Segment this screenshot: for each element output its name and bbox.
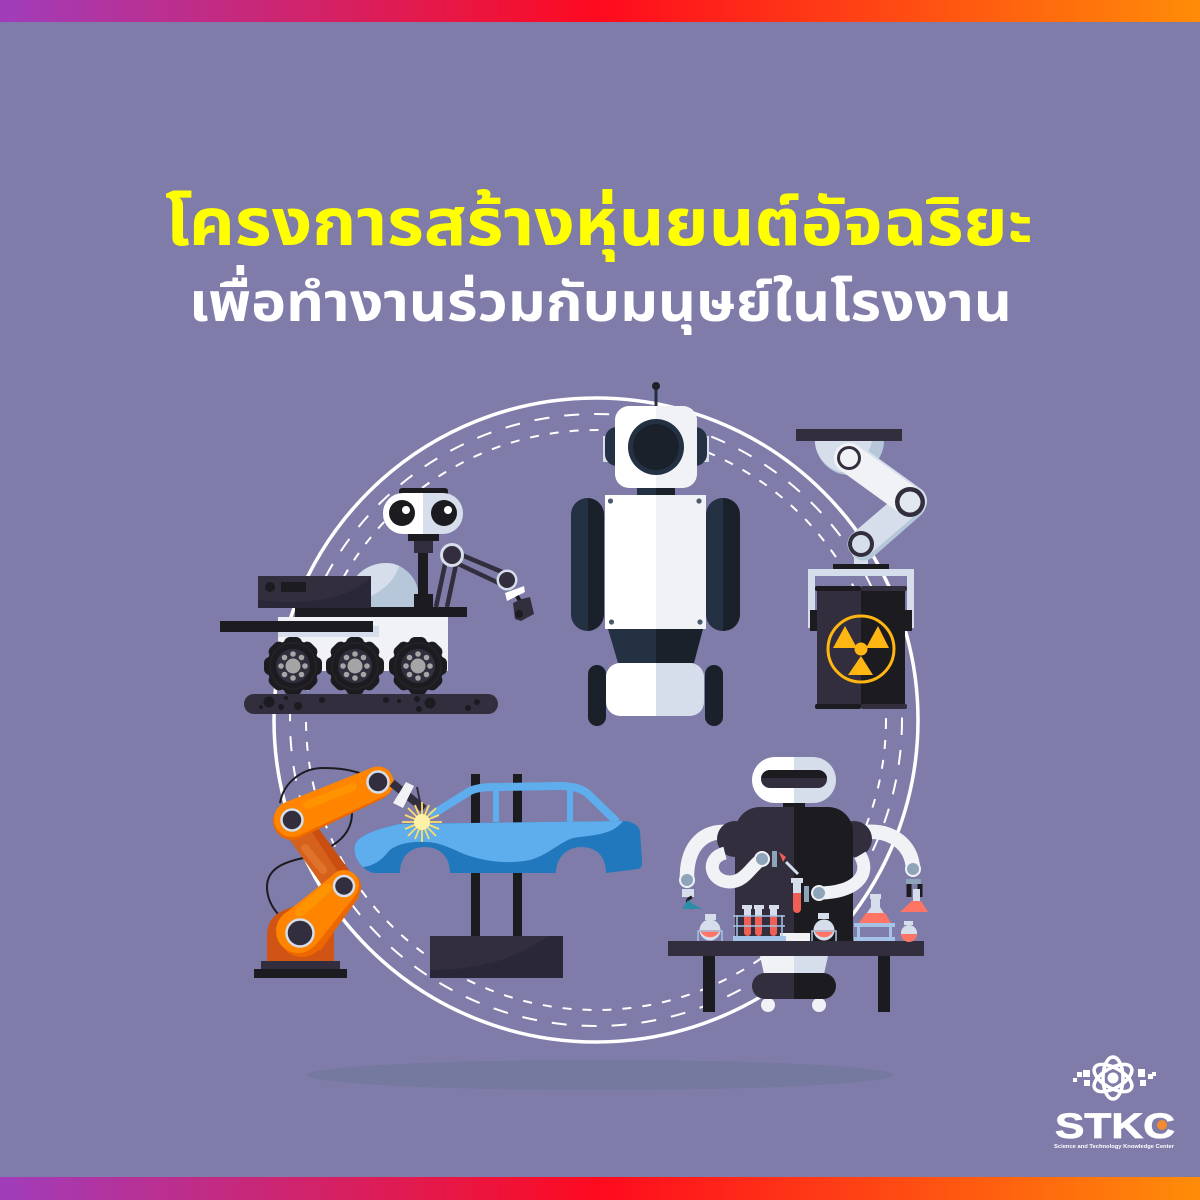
hips <box>606 663 704 716</box>
cables <box>267 768 365 914</box>
rover console box <box>258 576 371 608</box>
lower body <box>752 956 836 1012</box>
car body highlight <box>355 821 623 867</box>
ground shadow <box>307 1060 893 1090</box>
hand flask <box>900 889 928 912</box>
left arm <box>571 498 604 631</box>
car body <box>355 821 642 873</box>
logo orange dot <box>1157 1120 1167 1130</box>
central white robot <box>571 382 740 726</box>
joints <box>282 772 388 946</box>
conical flask on stand <box>854 894 895 941</box>
rover wheels <box>264 637 447 695</box>
round flask centre <box>812 913 836 941</box>
lab robot <box>668 757 928 1012</box>
ceiling robotic arm with barrel <box>796 429 925 709</box>
logo tagline: Science and Technology Knowledge Center <box>1054 1144 1175 1150</box>
circle rings <box>274 398 918 1042</box>
barrel <box>810 586 912 709</box>
rover ground strip <box>244 694 498 714</box>
middle link <box>290 829 349 895</box>
stand base <box>430 936 563 978</box>
waist <box>608 629 703 663</box>
neck <box>637 488 675 495</box>
title: โครงการสร้างหุ่นยนต์อัจฉริยะ <box>165 185 1033 262</box>
lower arm <box>276 870 361 957</box>
right arm <box>706 498 740 631</box>
head <box>615 406 697 488</box>
welder tool <box>392 782 424 809</box>
STKC logo <box>1054 1057 1175 1150</box>
ceiling arm <box>796 429 925 569</box>
torso <box>735 807 853 942</box>
bottom gradient bar <box>0 1177 1200 1200</box>
rover neck <box>408 534 439 607</box>
outer arms <box>687 832 913 880</box>
rover arm <box>436 543 534 621</box>
pedestal <box>267 905 334 961</box>
stand posts <box>471 774 522 937</box>
small flask right <box>901 921 917 942</box>
shoulders <box>717 821 872 857</box>
ears <box>603 427 709 466</box>
radiation symbol <box>828 616 894 682</box>
subtitle: เพื่อทำงานร่วมกับมนุษย์ในโรงงาน <box>189 265 1012 335</box>
hand test tube <box>791 878 803 913</box>
gripper frame <box>808 569 914 628</box>
rover side bar <box>220 621 373 632</box>
antenna <box>652 382 660 408</box>
rover head <box>383 488 463 534</box>
head <box>752 757 836 808</box>
rover dome <box>346 563 418 607</box>
base plates <box>254 961 347 978</box>
torso <box>605 495 706 629</box>
top gradient bar <box>0 0 1200 22</box>
atom icon <box>1090 1057 1136 1099</box>
car roof <box>430 786 617 822</box>
rover deck <box>295 607 467 617</box>
orange welding arm <box>254 766 424 978</box>
legs <box>588 665 723 726</box>
car on stand <box>355 774 642 978</box>
inner arms <box>712 853 864 893</box>
upper arm <box>273 766 394 840</box>
pixel dots <box>1073 1069 1156 1086</box>
test tube rack <box>733 905 786 941</box>
rover body <box>278 617 448 671</box>
round flask left <box>698 914 722 941</box>
arm joints and grippers <box>680 851 921 909</box>
logo wordmark: STKC <box>1055 1107 1175 1146</box>
table <box>668 933 924 1012</box>
welding spark <box>402 802 442 842</box>
rover robot <box>220 488 534 714</box>
